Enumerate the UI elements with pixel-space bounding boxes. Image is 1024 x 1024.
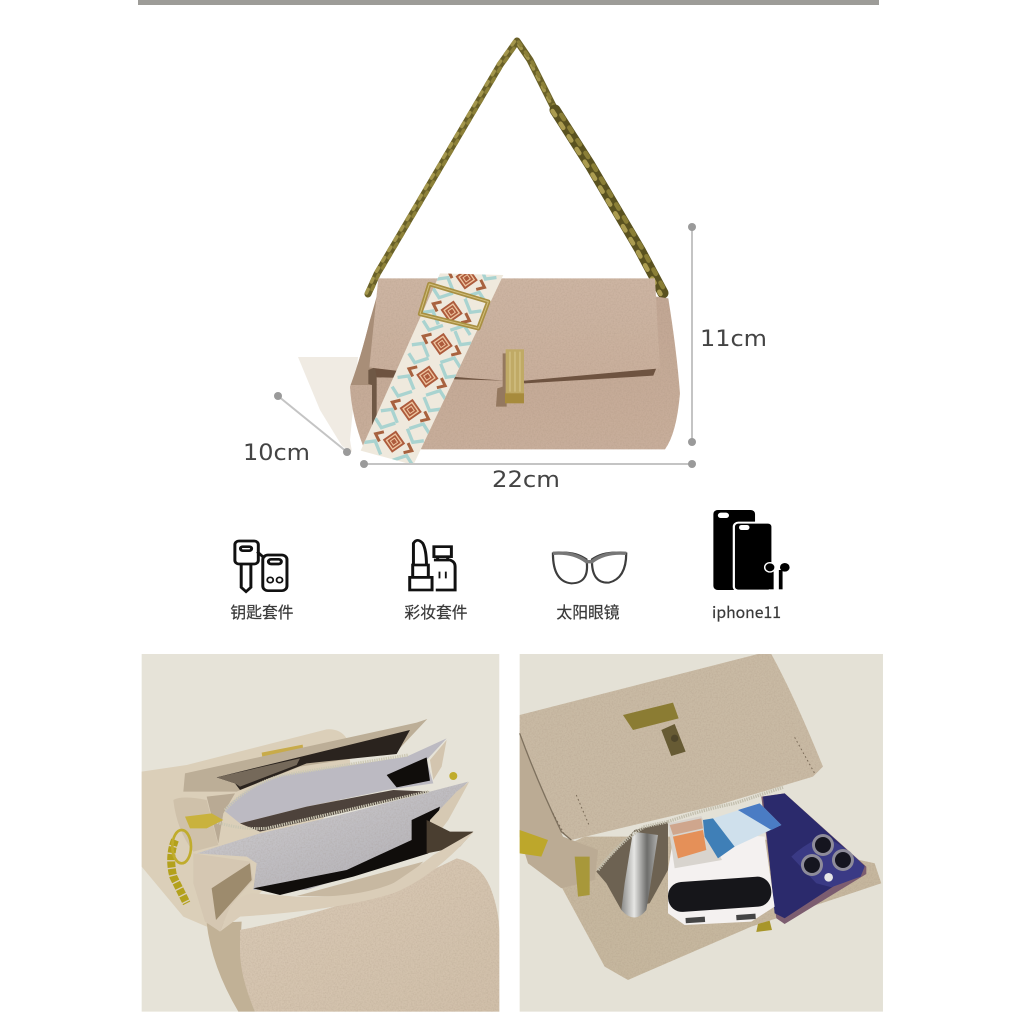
left body <box>520 733 598 888</box>
power bank <box>668 830 775 925</box>
gold clasp plate <box>262 745 303 759</box>
top divider bar <box>138 0 879 5</box>
flap <box>369 278 660 381</box>
flap shadow <box>375 367 657 383</box>
buckle <box>420 284 488 328</box>
lower flap <box>528 837 881 980</box>
stitching <box>553 737 815 835</box>
patterned strap <box>360 274 504 463</box>
card <box>713 803 781 847</box>
capacity item: sunglasses <box>553 552 626 622</box>
left gusset <box>173 797 218 852</box>
bronze clasp <box>623 703 679 730</box>
dimension: height 11cm: 11cm <box>700 327 767 352</box>
dimension: width 22cm <box>360 460 696 493</box>
clasp <box>496 349 524 407</box>
camera island <box>791 838 865 887</box>
photo panel: open bag interior <box>142 654 499 1012</box>
icon: sunglasses <box>553 552 626 583</box>
front rim <box>220 832 474 932</box>
top flap of bag <box>520 654 823 840</box>
rear silver pocket <box>223 738 447 823</box>
front silver pocket <box>197 782 468 890</box>
zippers <box>225 755 408 810</box>
capacity item: makeup set: 彩妆套件 <box>404 604 468 622</box>
photo panel: bag packed with items <box>520 654 883 1012</box>
chain strap <box>366 40 666 295</box>
cosmetic bottle <box>621 832 658 917</box>
gold hardware <box>520 830 548 857</box>
back wall <box>183 719 427 792</box>
icon: lipstick and bottle <box>410 540 455 590</box>
capacity item: makeup set <box>404 540 468 622</box>
capacity item: iphone11: iphone11 <box>712 600 781 623</box>
zipper and lining <box>598 822 668 870</box>
inner floor <box>297 862 423 897</box>
icon: keys <box>235 541 287 592</box>
front flap <box>240 858 499 1012</box>
gap between pockets <box>240 790 430 832</box>
capacity item: key set <box>230 541 294 622</box>
capacity item: key set: 钥匙套件 <box>230 604 294 622</box>
side gusset shadow <box>351 297 377 385</box>
capacity item: iphone11 <box>712 510 790 623</box>
cast shadow <box>298 357 358 452</box>
dimension: width 22cm: 22cm <box>492 468 560 493</box>
palette <box>668 816 722 868</box>
dimension: depth 10cm: 10cm <box>243 441 310 466</box>
back flap <box>142 729 353 927</box>
right gussets <box>430 740 447 780</box>
icon: phones and earbuds <box>713 510 790 591</box>
gold hardware <box>185 813 223 828</box>
bag body <box>350 297 680 449</box>
front left corner <box>193 853 253 932</box>
bag interior shadow <box>596 822 668 910</box>
capacity item: sunglasses: 太阳眼镜 <box>556 603 620 622</box>
main product photo: handbag <box>298 40 680 469</box>
dimension: depth 10cm <box>243 392 351 466</box>
floor shadow <box>207 922 255 1012</box>
dimension: height 11cm <box>688 223 767 446</box>
phone <box>761 793 866 924</box>
